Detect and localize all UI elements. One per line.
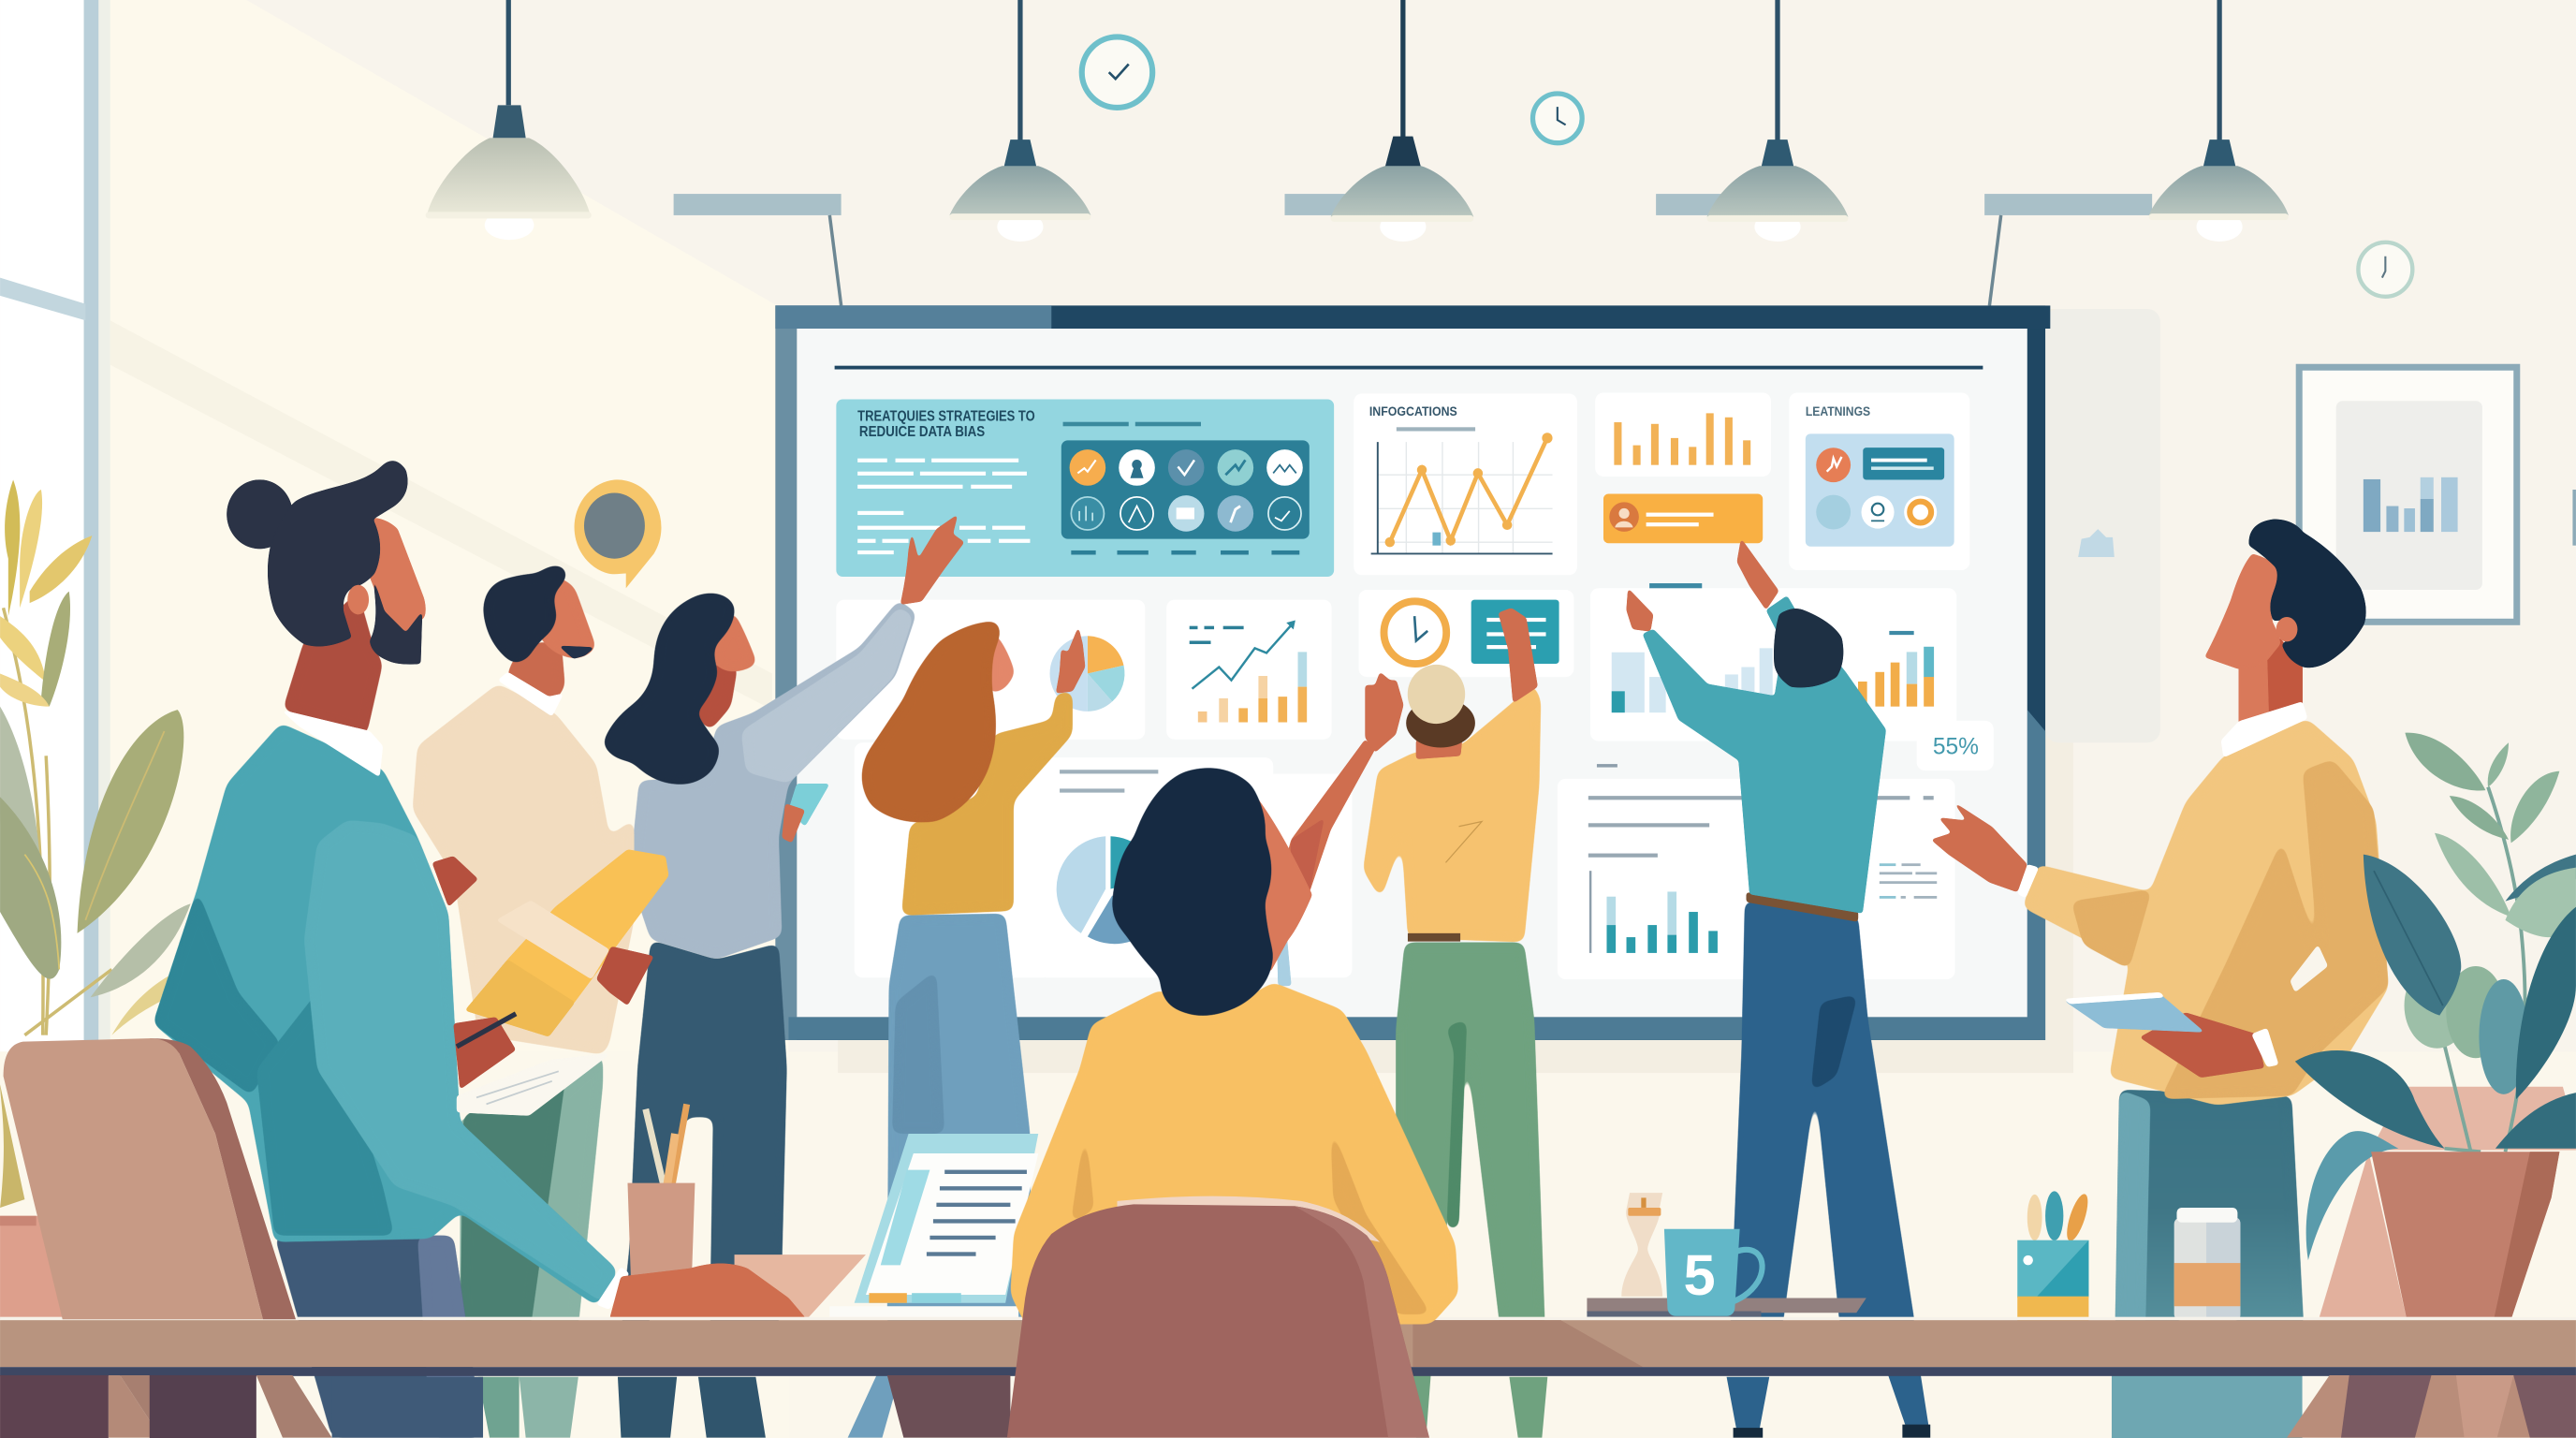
right plant pot [2371, 1152, 2559, 1319]
wall brackets for the screen [674, 194, 2152, 305]
cuff [596, 1267, 629, 1310]
hand [1931, 801, 2027, 892]
pen and paper lines [457, 1014, 559, 1104]
neck [283, 592, 383, 736]
sweater [2022, 719, 2389, 1106]
man 6: teal shirt pointing up [1730, 901, 1915, 1328]
mug with number 5: 5 [1684, 1243, 1716, 1308]
arm [304, 820, 618, 1303]
small beard [559, 646, 594, 659]
hair [2249, 520, 2366, 668]
speech bubble [575, 479, 661, 588]
panel: clock and teal card [1358, 590, 1573, 677]
neck [694, 657, 738, 731]
document under hand [735, 1255, 866, 1319]
callout: orange profile card [1603, 494, 1763, 543]
small legend lines [1880, 863, 1937, 899]
bars [1198, 652, 1307, 723]
orange bars [1858, 647, 1934, 707]
small wall clock [1532, 94, 1582, 143]
desk legs left [0, 1375, 332, 1438]
man 8 head and details [1931, 520, 2366, 1078]
jeans [1730, 901, 1915, 1328]
books [1587, 1298, 1866, 1317]
face [2204, 553, 2284, 669]
hand [1365, 672, 1403, 753]
panel: trend chart [1166, 600, 1332, 740]
panel: pie chart [836, 600, 1145, 740]
woman 7 sweater and hair [1010, 768, 1458, 1325]
sleeve [496, 901, 609, 979]
folder [465, 849, 668, 1036]
collar [281, 710, 383, 777]
pendant lamp 1 [426, 0, 592, 240]
desk legs middle [887, 1375, 1010, 1438]
heading: leatnings: LEATNINGS [1806, 404, 1870, 418]
trousers [621, 940, 787, 1328]
sweater [1010, 982, 1458, 1325]
pendant lamp 2 [949, 0, 1090, 242]
neck [506, 640, 565, 710]
panel: blue and orange bars [1590, 583, 1956, 741]
man 5 details [1408, 608, 1538, 942]
figures below the desk [478, 1373, 2303, 1438]
panel: infogcations line chart [1354, 393, 1577, 575]
shirt [1643, 595, 1886, 914]
belt [1408, 933, 1460, 942]
raised arm [1499, 608, 1538, 703]
laptop on desk [829, 1134, 1038, 1319]
left plant [0, 479, 243, 1208]
hair [268, 461, 407, 646]
panel: lower left blank card [855, 742, 1051, 977]
trousers [2115, 1090, 2304, 1328]
hand below tablet [2140, 1012, 2264, 1078]
heading: strategies panel subtitle: REDUICE DATA BIAS [859, 424, 985, 440]
bars [1606, 891, 1718, 953]
hourglass on books [1621, 1193, 1662, 1297]
left chair [4, 1038, 296, 1319]
hand with pen and paper [432, 856, 611, 1116]
trousers [460, 1051, 603, 1328]
pie chart [1050, 636, 1124, 712]
front chair [1007, 1196, 1429, 1438]
beard [370, 572, 422, 664]
man 1 ear [347, 585, 369, 614]
heading: strategies panel title: TREATQUIES STRATEGIES TO [857, 408, 1035, 424]
trousers [274, 1236, 483, 1438]
blue bars [1612, 648, 1773, 712]
callout: 55% stat: 55% [1933, 735, 1979, 760]
pendant lamp 3 [1331, 0, 1473, 242]
trend line with arrow [1193, 621, 1295, 689]
man 2: cream sweater with folder [413, 565, 634, 1328]
screen frame [775, 305, 2050, 1040]
pendant lamp 5 [2149, 0, 2289, 242]
forearm raised [1265, 740, 1375, 935]
woman 4 raised hand [1056, 626, 1085, 694]
green trousers lower legs man 2 [478, 1377, 520, 1438]
face [539, 575, 596, 659]
hair [1774, 609, 1843, 687]
heading: infogcations: INFOGCATIONS [1369, 404, 1457, 418]
sweater [413, 683, 634, 1055]
face [707, 608, 757, 672]
shadow panel behind screen [838, 309, 2160, 1073]
neck [2239, 638, 2303, 725]
top [901, 691, 1073, 916]
pie chart [1057, 836, 1160, 944]
wall clock with check [1082, 37, 1152, 108]
line chart series [1385, 433, 1553, 547]
hair [603, 593, 735, 785]
brush holder [2017, 1191, 2092, 1321]
text lines placeholder [857, 459, 1030, 554]
shirt [1363, 682, 1541, 943]
pen cup [627, 1104, 695, 1280]
collar [498, 672, 564, 716]
panel: lower pie chart [1039, 757, 1352, 977]
cuff [2017, 864, 2039, 898]
tablet [2063, 994, 2204, 1033]
sweater [153, 723, 618, 1306]
right wall clock [2358, 242, 2412, 297]
pendant lamp 4 [1707, 0, 1848, 242]
callout: 55% stat [1917, 721, 1994, 770]
hair [861, 621, 1000, 823]
icon card [1806, 433, 1954, 547]
man 2 details [465, 646, 668, 1036]
face [1245, 795, 1312, 973]
blue strap [1277, 914, 1292, 986]
green trousers [1396, 943, 1545, 1328]
hand on desk [609, 1264, 807, 1319]
woman 3 raised hand [782, 514, 964, 843]
panel: strategies to reduce data bias [836, 399, 1334, 577]
neck [1416, 740, 1462, 759]
panel: leatnings [1789, 392, 1969, 570]
panel: lower bar chart [1558, 764, 1955, 979]
bun [227, 479, 293, 549]
right plant [2295, 733, 2576, 1260]
icon: clock [1383, 601, 1446, 664]
icon grid card [1061, 440, 1310, 539]
face [989, 627, 1016, 695]
man 8 ear [2276, 617, 2297, 641]
right plant stand [2319, 1087, 2576, 1319]
man 8: yellow sweater with tablet [2022, 719, 2389, 1328]
left planter [0, 1216, 74, 1319]
desk [0, 1317, 2576, 1376]
jar [2174, 1208, 2240, 1321]
dashboard screen [775, 305, 2050, 1040]
hand on folder [596, 946, 654, 1005]
hair [1112, 768, 1273, 1016]
jeans [887, 914, 1032, 1328]
shirt [629, 600, 916, 960]
man 1: teal sweater at desk [153, 592, 618, 1438]
hair [483, 565, 566, 663]
man 6 details [1627, 538, 1886, 922]
man 5 head [1406, 665, 1482, 862]
collar [2221, 701, 2307, 757]
hands [1627, 588, 1653, 631]
picture frame with bar chart [2299, 367, 2517, 622]
mug with number 5 [1664, 1229, 1763, 1316]
woman 4: orange hair, mustard top [861, 621, 1073, 1328]
woman 3: grey shirt, raised arm [603, 593, 916, 1328]
belt [1747, 892, 1858, 922]
woman 7: seated, seen from behind [1245, 672, 1403, 986]
desk legs right [2287, 1375, 2576, 1438]
panel: orange bar chart [1595, 392, 1771, 477]
man 5: back view with cap [1363, 682, 1545, 1328]
man 1 head [227, 461, 629, 1310]
face [370, 518, 426, 633]
man 1 lower legs in front of the desk stretcher [332, 1377, 483, 1438]
